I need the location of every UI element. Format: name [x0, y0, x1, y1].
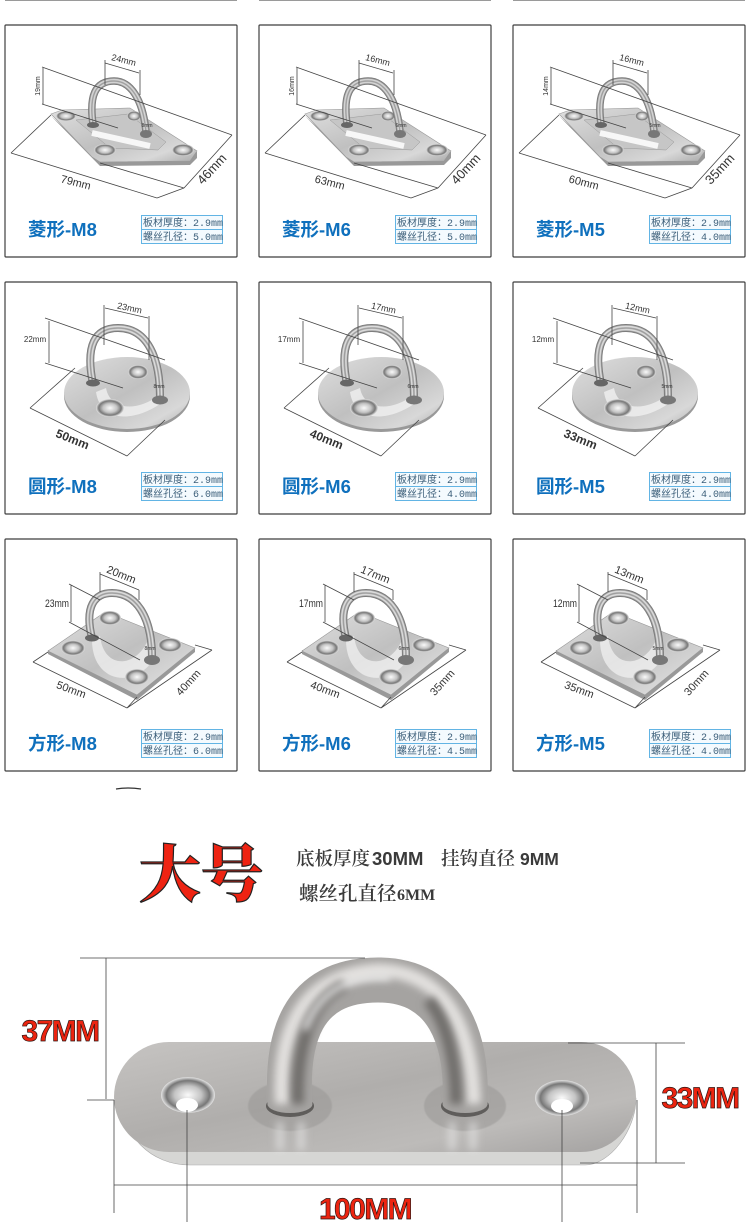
separator artifact: [116, 788, 141, 789]
panel: square M5: 30mm: [682, 668, 711, 698]
panel: square M6: 35mm: [428, 668, 457, 698]
panel: round M6: 圆形-M6: [282, 476, 351, 497]
panel: diamond M5: 5mm: [649, 123, 661, 129]
panel: square M8: 23mm: [45, 598, 69, 610]
heading: large size: 大号: [139, 825, 263, 914]
top edge strips: [5, 0, 745, 1]
panel: square M5: 螺丝孔径：4.0mm: [651, 744, 731, 758]
panel: round M8: 板材厚度：2.9mm: [143, 473, 223, 487]
panel: diamond M8: 螺丝孔径：5.0mm: [143, 230, 223, 244]
large fastener illustration: [114, 970, 636, 1165]
panel: square M8: 板材厚度：2.9mm: [143, 730, 223, 744]
panel: diamond M5: 14mm: [543, 76, 550, 96]
panel: diamond M5: 35mm: [702, 151, 738, 187]
panel: round M6: 17mm: [278, 335, 300, 344]
panel: square M8: [5, 539, 237, 771]
panel: square M6: [259, 539, 491, 771]
panel: round M8: [5, 282, 237, 514]
panel: round M8: 螺丝孔径：6.0mm: [143, 487, 223, 501]
dimension: height 37MM: 37MM: [22, 1015, 98, 1048]
panel: round M6: 板材厚度：2.9mm: [397, 473, 477, 487]
panel: square M5: 方形-M5: [536, 733, 605, 754]
panel: diamond M8: 板材厚度：2.9mm: [143, 216, 223, 230]
panel: diamond M6: 40mm: [448, 151, 484, 187]
panel: square M5: 5mm: [652, 646, 664, 652]
panel: square M5: [513, 539, 745, 771]
panel: diamond M8: 24mm: [110, 52, 137, 68]
panel: round M5: 螺丝孔径：4.0mm: [651, 487, 731, 501]
panel: square M5: 12mm: [553, 598, 577, 610]
specification line one: 30MM: [372, 848, 423, 869]
panel: round M5: 圆形-M5: [536, 476, 605, 497]
panel: square M5: 35mm: [563, 679, 595, 701]
panel: round M6: [259, 282, 491, 514]
specification line one: 底板厚度: [296, 845, 370, 871]
panel: round M5: [513, 282, 745, 514]
panel: diamond M6: 板材厚度：2.9mm: [397, 216, 477, 230]
panel: square M6: 方形-M6: [282, 733, 351, 754]
panel: diamond M6: 菱形-M6: [282, 219, 351, 240]
panel: square M6: 螺丝孔径：4.5mm: [397, 744, 477, 758]
panel: square M8: 方形-M8: [28, 733, 97, 754]
specification line two: 6MM: [397, 887, 435, 904]
panel: diamond M8: 19mm: [35, 76, 42, 96]
panel: square M6: 17mm: [299, 598, 323, 610]
specification line one: 9MM: [520, 849, 559, 869]
panel: round M6: 17mm: [370, 301, 397, 316]
panel: square M6: 板材厚度：2.9mm: [397, 730, 477, 744]
panel: diamond M6: 6mm: [395, 123, 407, 129]
panel: diamond M8: 8mm: [141, 123, 153, 129]
panel: diamond M5: 菱形-M5: [536, 219, 605, 240]
panel: square M6: 17mm: [359, 564, 392, 587]
specification line one: 挂钩直径: [441, 845, 516, 871]
panel: diamond M8: [5, 25, 237, 257]
panel: square M6: 6mm: [398, 646, 410, 652]
panel: round M5: 12mm: [532, 335, 554, 344]
panel: round M8: 8mm: [153, 384, 165, 390]
panel: square M8: 40mm: [174, 668, 203, 698]
panel: diamond M6: 螺丝孔径：5.0mm: [397, 230, 477, 244]
panel: diamond M8: 79mm: [59, 174, 92, 193]
panel: diamond M5: 60mm: [567, 174, 600, 193]
dimension lines: [80, 958, 685, 1222]
panel: round M8: 50mm: [54, 426, 91, 452]
panel: diamond M5: 板材厚度：2.9mm: [651, 216, 731, 230]
panel: diamond M5: 16mm: [618, 52, 645, 68]
panel: round M8: 22mm: [24, 335, 46, 344]
specification line two: 螺丝孔直径: [299, 878, 397, 906]
panel: square M6: 40mm: [309, 679, 341, 701]
panel: diamond M8: 菱形-M8: [28, 219, 97, 240]
panel: square M5: 板材厚度：2.9mm: [651, 730, 731, 744]
panel: diamond M6: 16mm: [289, 76, 296, 96]
panel: round M6: 螺丝孔径：4.0mm: [397, 487, 477, 501]
panel: round M6: 40mm: [308, 426, 345, 452]
panel: round M5: 板材厚度：2.9mm: [651, 473, 731, 487]
panel: round M6: 6mm: [407, 384, 419, 390]
panel: square M5: 13mm: [613, 564, 646, 587]
panel: diamond M6: 16mm: [364, 52, 391, 68]
panel: round M5: 5mm: [661, 384, 673, 390]
panel: square M8: 50mm: [55, 679, 87, 701]
panel: square M8: 20mm: [105, 564, 138, 587]
panel: square M8: 螺丝孔径：6.0mm: [143, 744, 223, 758]
panel: square M8: 8mm: [144, 646, 156, 652]
dimension: width 33MM: 33MM: [662, 1082, 738, 1115]
panel: diamond M6: 63mm: [313, 174, 346, 193]
panel: diamond M5: [513, 25, 745, 257]
panel: round M8: 23mm: [116, 301, 143, 316]
panel: round M5: 33mm: [562, 426, 599, 452]
panel: round M8: 圆形-M8: [28, 476, 97, 497]
panel: diamond M5: 螺丝孔径：4.0mm: [651, 230, 731, 244]
panel: round M5: 12mm: [624, 301, 651, 316]
panel: diamond M6: [259, 25, 491, 257]
panel: diamond M8: 46mm: [194, 151, 230, 187]
